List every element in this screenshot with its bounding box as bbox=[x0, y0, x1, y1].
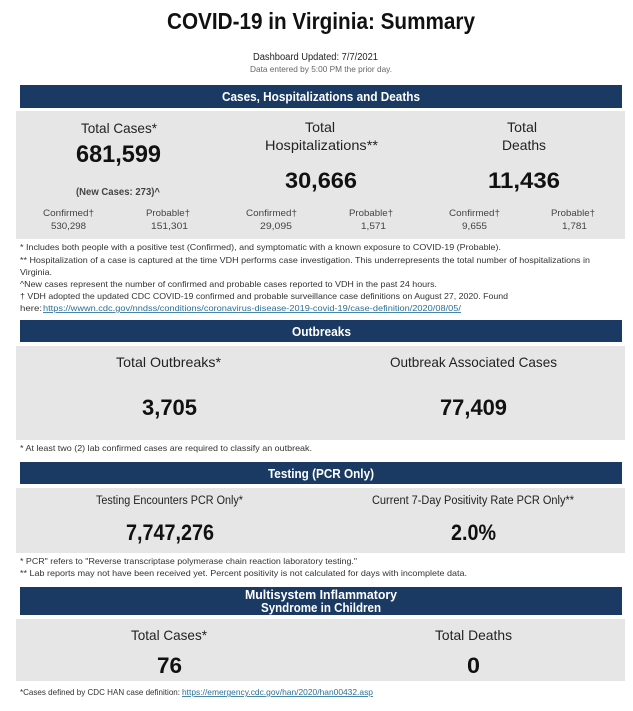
outbreak associated cases: 77,409 bbox=[440, 395, 507, 420]
total hospitalizations bbox=[265, 119, 379, 193]
header: testing: Testing (PCR Only) bbox=[268, 466, 374, 481]
title: COVID-19 in Virginia: Summary bbox=[167, 8, 475, 34]
total deaths: 11,436 bbox=[488, 168, 560, 193]
footnotes: cases: https://wwwn.cdc.gov/nndss/conditions/coronavirus-disease-2019-covid-19/case-definition/2020/08/05/ bbox=[43, 303, 462, 313]
MIS-C total deaths bbox=[435, 627, 512, 678]
cases breakdown: Probable† bbox=[146, 208, 190, 219]
footnote: MIS-C: https://emergency.cdc.gov/han/2020/han00432.asp bbox=[182, 687, 373, 697]
testing encounters: 7,747,276 bbox=[126, 520, 214, 545]
header: cases: Cases, Hospitalizations and Deaths bbox=[222, 89, 420, 104]
header: MIS-C: Syndrome in Children bbox=[261, 600, 381, 615]
header: cases bbox=[20, 85, 622, 108]
total deaths bbox=[488, 119, 560, 193]
panel: MIS-C bbox=[16, 619, 625, 681]
outbreak associated cases: Outbreak Associated Cases bbox=[390, 354, 557, 370]
footnote: MIS-C bbox=[20, 687, 373, 697]
footnotes: cases: † VDH adopted the updated CDC COVID-19 confirmed and probable surveillance case definitions on August 27, 2020. Found bbox=[20, 291, 508, 301]
MIS-C total deaths: 0 bbox=[467, 653, 480, 678]
hospitalizations breakdown bbox=[246, 208, 393, 232]
footnotes: cases: ^New cases represent the number of confirmed and probable cases reported to VDH in the past 24 hours. bbox=[20, 279, 437, 289]
cases breakdown: 151,301 bbox=[151, 221, 188, 232]
footnotes: cases: Virginia. bbox=[20, 267, 52, 277]
MIS-C total cases: Total Cases* bbox=[131, 627, 208, 643]
footnote: MIS-C: *Cases defined by CDC HAN case definition: bbox=[20, 687, 180, 697]
total cases: Total Cases* bbox=[81, 120, 158, 136]
total hospitalizations: 30,666 bbox=[285, 168, 357, 193]
outbreak associated cases bbox=[390, 354, 557, 420]
deaths breakdown: Confirmed† bbox=[449, 208, 500, 219]
footnotes: cases: here: bbox=[20, 303, 42, 313]
cases breakdown: Confirmed† bbox=[43, 208, 94, 219]
total cases: (New Cases: 273)^ bbox=[76, 187, 160, 198]
header: outbreaks bbox=[20, 320, 622, 342]
footnotes: testing: ** Lab reports may not have been received yet. Percent positivity is not calculated for days with incomplete data. bbox=[20, 568, 467, 578]
footnotes: testing bbox=[20, 556, 467, 578]
total hospitalizations: Hospitalizations** bbox=[265, 137, 379, 153]
deaths breakdown: 9,655 bbox=[462, 221, 487, 232]
cases breakdown bbox=[43, 208, 190, 232]
header: MIS-C bbox=[20, 587, 622, 615]
MIS-C total cases: 76 bbox=[157, 653, 182, 678]
testing encounters bbox=[96, 495, 243, 545]
panel: cases, hospitalizations, deaths bbox=[16, 111, 625, 239]
positivity rate bbox=[372, 495, 574, 545]
total outbreaks: Total Outbreaks* bbox=[116, 354, 222, 370]
total outbreaks bbox=[116, 354, 222, 420]
total outbreaks: 3,705 bbox=[142, 395, 197, 420]
panel: testing bbox=[16, 488, 625, 553]
hospitalizations breakdown: 29,095 bbox=[260, 221, 292, 232]
footnotes: cases: ** Hospitalization of a case is captured at the time VDH performs case investigation. This underrepresents the total number of hospitalizations in bbox=[20, 255, 590, 265]
MIS-C total cases bbox=[131, 627, 208, 678]
deaths breakdown: Probable† bbox=[551, 208, 595, 219]
footnote: outbreaks: * At least two (2) lab confirmed cases are required to classify an outbreak. bbox=[20, 443, 312, 453]
cases breakdown: 530,298 bbox=[51, 221, 86, 232]
update date: Data entered by 5:00 PM the prior day. bbox=[250, 64, 392, 74]
total cases bbox=[76, 120, 161, 198]
update date bbox=[250, 52, 392, 74]
update date: Dashboard Updated: 7/7/2021 bbox=[253, 52, 378, 63]
deaths breakdown: 1,781 bbox=[562, 221, 587, 232]
hospitalizations breakdown: 1,571 bbox=[361, 221, 386, 232]
footnotes: cases: * Includes both people with a positive test (Confirmed), and symptomatic with a known exposure to COVID-19 (Probable). bbox=[20, 242, 501, 252]
total cases: 681,599 bbox=[76, 141, 161, 168]
header: MIS-C: Multisystem Inflammatory bbox=[245, 587, 398, 602]
total deaths: Deaths bbox=[502, 137, 546, 153]
total hospitalizations: Total bbox=[305, 119, 335, 135]
hospitalizations breakdown: Probable† bbox=[349, 208, 393, 219]
hospitalizations breakdown: Confirmed† bbox=[246, 208, 297, 219]
total deaths: Total bbox=[507, 119, 537, 135]
header: testing bbox=[20, 462, 622, 484]
positivity rate: 2.0% bbox=[451, 520, 496, 545]
header: outbreaks: Outbreaks bbox=[292, 324, 351, 339]
positivity rate: Current 7-Day Positivity Rate PCR Only** bbox=[372, 495, 574, 507]
testing encounters: Testing Encounters PCR Only* bbox=[96, 495, 243, 507]
deaths breakdown bbox=[449, 208, 595, 232]
panel: outbreaks bbox=[16, 346, 625, 440]
footnotes: cases bbox=[20, 242, 590, 313]
MIS-C total deaths: Total Deaths bbox=[435, 627, 512, 643]
footnotes: testing: * PCR" refers to "Reverse transcriptase polymerase chain reaction laboratory testing." bbox=[20, 556, 357, 566]
